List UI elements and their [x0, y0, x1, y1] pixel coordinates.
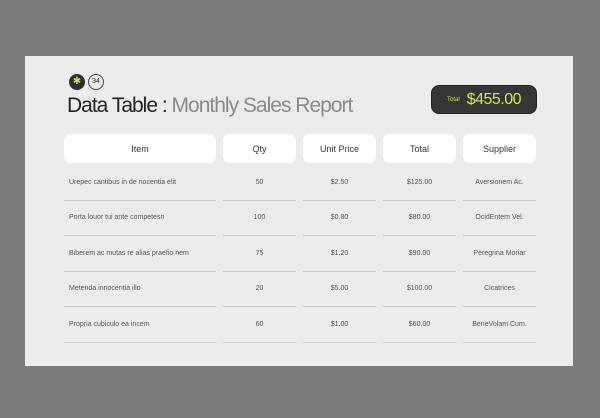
table header: Total [410, 144, 429, 154]
callout: total: $455.00 [467, 90, 521, 108]
table body: Propria cubiculo ea incem [69, 321, 150, 328]
table body: Biberem ac mutas re alias praefio nem [69, 250, 189, 257]
icon: dark badge: ✱ [73, 76, 81, 87]
table body: $60.00 [409, 321, 430, 328]
callout: total: Total [447, 96, 460, 102]
table body: $2.50 [331, 179, 348, 186]
table header [64, 134, 536, 163]
table body: Porta louor tui ante competesn [69, 214, 164, 221]
table body: BeneVolam Cum. [472, 321, 527, 328]
icon: number badge [88, 74, 104, 90]
table body: Metenda innocentia illo [69, 285, 141, 292]
table body: $5.00 [331, 285, 348, 292]
title: Data Table : Monthly Sales Report [67, 94, 352, 117]
table body: Peregrina Moriar [473, 250, 526, 257]
table body: Aversionem Ac. [475, 179, 524, 186]
table header: Supplier [483, 144, 516, 154]
table body: 60 [256, 321, 263, 328]
icon: dark badge [69, 74, 85, 90]
table body: 20 [256, 285, 263, 292]
table body: $90.00 [409, 250, 430, 257]
table header: Unit Price [320, 144, 359, 154]
table header: Item [131, 144, 149, 154]
table body: $100.00 [407, 285, 432, 292]
table body: $1.20 [331, 250, 348, 257]
table body: $80.00 [409, 214, 430, 221]
panel: card [25, 56, 573, 366]
table body: Cicatrices [484, 285, 515, 292]
table body: $125.00 [407, 179, 432, 186]
table body: OcidEntem Vel. [475, 214, 524, 221]
icon: number badge: 34 [92, 78, 100, 85]
callout: total [431, 85, 537, 114]
table body: Urepec cantibus in de nocentia elit [69, 179, 176, 186]
table body: $0.80 [331, 214, 348, 221]
table header: Qty [252, 144, 266, 154]
table body: 50 [256, 179, 263, 186]
table body: $1.00 [331, 321, 348, 328]
table body [64, 178, 536, 343]
table body: 100 [254, 214, 265, 221]
table body: 75 [256, 250, 263, 257]
